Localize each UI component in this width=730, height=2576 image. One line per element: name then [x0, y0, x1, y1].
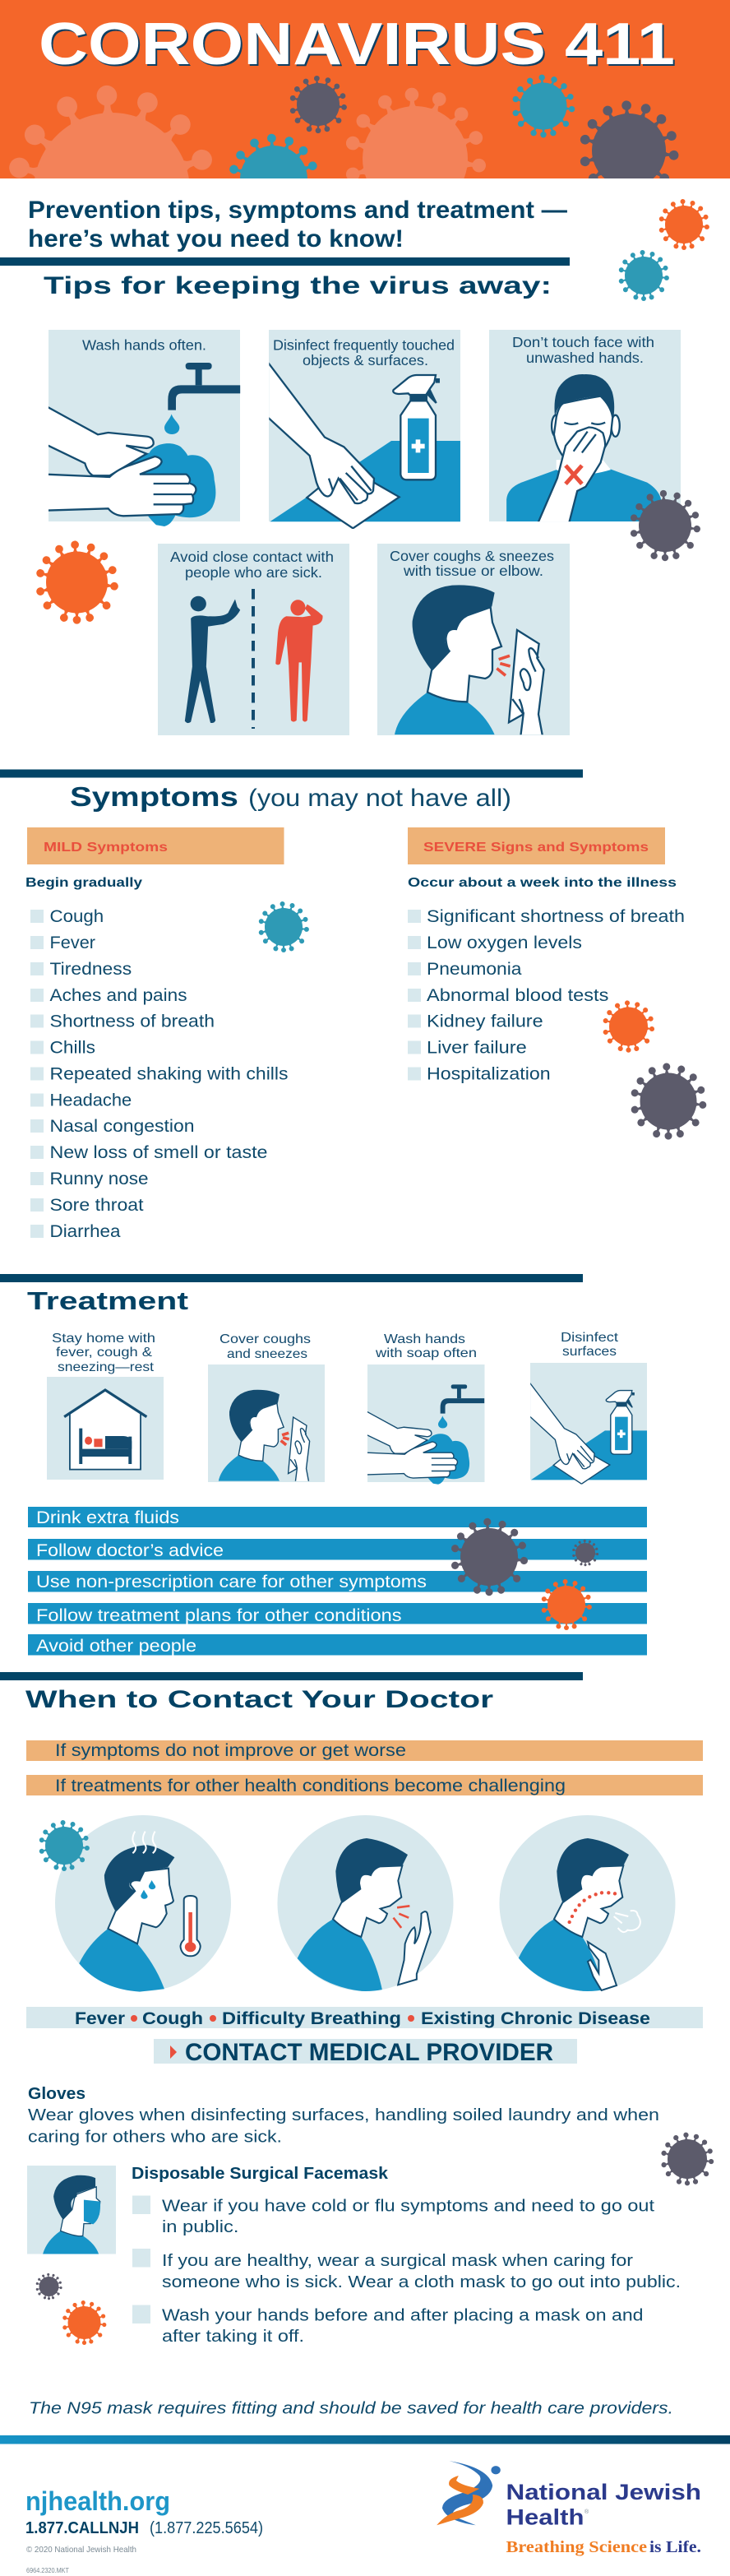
- logo: National Jewish Health: National Jewish: [506, 2480, 701, 2504]
- facemask list: Disposable Surgical Facemask: [132, 2165, 389, 2183]
- icon: teal virus: [618, 250, 669, 301]
- treatment bars: Drink extra fluids: [36, 1508, 179, 1527]
- icon: orange virus: [603, 1000, 654, 1053]
- heading: treatment: Treatment: [27, 1286, 188, 1315]
- panel: wash hands: Wash hands often.: [82, 337, 206, 354]
- facemask list: Wear if you have cold or flu symptoms and need to go out: [162, 2197, 654, 2216]
- panel: mild symptoms: Nasal congestion: [49, 1117, 194, 1136]
- panel: severe symptoms: Low oxygen levels: [427, 934, 582, 952]
- footer contact: (1.877.225.5654): [150, 2519, 263, 2537]
- icon: grey virus: [630, 490, 700, 561]
- facemask list: [132, 2165, 681, 2346]
- panel: severe symptoms: Abnormal blood tests: [427, 986, 608, 1005]
- panel: disinfect: Disinfect frequently touched: [273, 337, 455, 354]
- panel: avoid contact: Avoid close contact with: [170, 549, 334, 565]
- facemask list: in public.: [162, 2217, 238, 2236]
- panel: avoid contact: people who are sick.: [185, 564, 322, 581]
- panel: mild symptoms: Sore throat: [49, 1196, 144, 1215]
- treatment bars: Use non-prescription care for other symptoms: [36, 1573, 427, 1591]
- gloves text: [28, 2085, 659, 2147]
- panel: cover coughs: Cover coughs & sneezes: [390, 548, 554, 564]
- symptom band: Fever: [75, 2009, 125, 2028]
- panel: wash hands: [45, 330, 240, 526]
- heading: when to contact your doctor: When to Contact Your Doctor: [25, 1686, 493, 1713]
- panel: disinfect: [267, 330, 460, 528]
- symptom band: Existing Chronic Disease: [421, 2009, 650, 2028]
- panel: disinfect surfaces: [529, 1331, 647, 1484]
- panel: severe symptoms: Pneumonia: [427, 960, 522, 979]
- illustration: fever: [55, 1815, 231, 1992]
- panel: severe symptoms: Kidney failure: [427, 1012, 543, 1031]
- footer contact: © 2020 National Jewish Health: [26, 2545, 136, 2555]
- heading: tips: Tips for keeping the virus away:: [44, 272, 552, 299]
- icon: orange virus: [35, 540, 118, 624]
- panel: stay home: sneezing—rest: [58, 1360, 155, 1374]
- icon: orange virus: [658, 199, 709, 250]
- panel: mild symptoms: Begin gradually: [25, 876, 142, 890]
- heading: symptoms: [70, 781, 511, 812]
- facemask list: after taking it off.: [162, 2327, 304, 2346]
- contact medical provider callout: CONTACT MEDICAL PROVIDER: [185, 2039, 553, 2066]
- illustration: difficulty breathing: [500, 1815, 676, 1992]
- gloves text: Wear gloves when disinfecting surfaces, handling soiled laundry and when: [28, 2106, 659, 2124]
- callout bars: [26, 1740, 703, 1795]
- gloves text: caring for others who are sick.: [28, 2127, 282, 2147]
- logo: National Jewish Health: Health: [506, 2505, 584, 2530]
- facemask list: someone who is sick. Wear a cloth mask to go out into public.: [162, 2273, 681, 2291]
- panel: cover coughs and sneezes: and sneezes: [227, 1347, 307, 1361]
- icon: face touch: [506, 374, 663, 524]
- panel: wash hands with soap: with soap often: [375, 1346, 477, 1360]
- panel: disinfect: objects & surfaces.: [303, 352, 428, 368]
- panel: stay home: fever, cough &: [56, 1346, 152, 1360]
- icon: small grey virus: [35, 2273, 62, 2300]
- footer contact: [25, 2486, 263, 2574]
- panel: mild symptoms: Fever: [49, 934, 95, 952]
- panel: stay home: [47, 1332, 164, 1480]
- intro heading: Prevention tips, symptoms and treatment —: [28, 197, 567, 224]
- panel: mild symptoms: Shortness of breath: [49, 1012, 215, 1031]
- panel: mild symptoms: Repeated shaking with chills: [49, 1064, 288, 1084]
- panel: stay home: Stay home with: [52, 1332, 155, 1346]
- gloves text: Gloves: [28, 2085, 85, 2103]
- panel: mild symptoms: Chills: [49, 1038, 95, 1058]
- icon: grey virus: [661, 2132, 714, 2185]
- header viruses: [9, 74, 679, 178]
- panel: disinfect surfaces: surfaces: [562, 1345, 617, 1359]
- treatment bars: Avoid other people: [36, 1637, 196, 1656]
- symptom band: Difficulty Breathing: [222, 2009, 401, 2028]
- logo: National Jewish Health: ®: [584, 2509, 589, 2515]
- panel: mild symptoms: Diarrhea: [49, 1222, 121, 1241]
- intro heading: here’s what you need to know!: [28, 225, 404, 253]
- icon: grey virus: [450, 1518, 528, 1596]
- icon: orange virus: [62, 2300, 107, 2345]
- treatment bars: [28, 1507, 647, 1656]
- panel: severe symptoms: SEVERE Signs and Symptoms: [423, 841, 649, 855]
- callout bars: If symptoms do not improve or get worse: [55, 1741, 406, 1760]
- panel: cover coughs: [377, 544, 570, 736]
- icon: two people: [185, 596, 323, 723]
- panel: mild symptoms: Headache: [49, 1091, 132, 1110]
- panel: mask portrait: [27, 2166, 116, 2254]
- icon: teal virus: [258, 901, 309, 952]
- footer contact: 6964.2320.MKT: [26, 2567, 69, 2574]
- panel: avoid contact: [158, 544, 349, 735]
- heading: symptoms: (you may not have all): [248, 785, 511, 812]
- title: CORONAVIRUS 411: [39, 12, 675, 77]
- treatment bars: Follow doctor’s advice: [36, 1541, 224, 1560]
- logo: National Jewish Health: [437, 2461, 701, 2556]
- panel: cover coughs: with tissue or elbow.: [403, 563, 543, 579]
- panel: don't touch face: unwashed hands.: [526, 350, 644, 366]
- intro heading: [28, 197, 567, 253]
- N95 note: The N95 mask requires fitting and should be saved for health care providers.: [29, 2399, 673, 2418]
- panel: mild symptoms: Runny nose: [49, 1170, 148, 1188]
- panel: mild symptoms: [25, 827, 288, 1241]
- facemask list: Wash your hands before and after placing a mask on and: [162, 2306, 643, 2324]
- symptom band: Cough: [142, 2009, 203, 2028]
- icon: teal virus: [39, 1820, 90, 1871]
- panel: severe symptoms: [408, 827, 685, 1084]
- panel: severe symptoms: Liver failure: [427, 1038, 527, 1058]
- icon: house with bed: [64, 1390, 146, 1470]
- panel: cover coughs and sneezes: Cover coughs: [219, 1332, 311, 1346]
- symptom band: [26, 2007, 703, 2028]
- treatment bars: Follow treatment plans for other conditions: [36, 1606, 401, 1625]
- callout bars: If treatments for other health conditions become challenging: [55, 1777, 566, 1795]
- panel: severe symptoms: Hospitalization: [427, 1064, 551, 1084]
- illustration: cough: [278, 1815, 454, 1992]
- panel: cover coughs and sneezes: [208, 1332, 325, 1482]
- icon: small grey virus: [572, 1540, 598, 1566]
- panel: mild symptoms: Aches and pains: [49, 986, 187, 1005]
- footer contact: 1.877.CALLNJH: [25, 2519, 139, 2537]
- panel: severe symptoms: Occur about a week into the illness: [408, 876, 677, 890]
- panel: mild symptoms: Tiredness: [49, 960, 132, 979]
- panel: mild symptoms: Cough: [49, 907, 104, 926]
- panel: don't touch face: [489, 330, 681, 524]
- facemask list: If you are healthy, wear a surgical mask when caring for: [162, 2251, 633, 2270]
- logo: National Jewish Health: Breathing Science: [506, 2538, 647, 2556]
- icon: orange virus: [541, 1579, 592, 1630]
- heading: symptoms: Symptoms: [70, 781, 238, 812]
- panel: mild symptoms: New loss of smell or taste: [49, 1143, 268, 1162]
- panel: mild symptoms: MILD Symptoms: [44, 841, 168, 855]
- header banner: [0, 0, 730, 178]
- panel: disinfect surfaces: Disinfect: [561, 1331, 619, 1345]
- logo: National Jewish Health: is Life.: [649, 2538, 701, 2556]
- panel: wash hands with soap: Wash hands: [384, 1332, 465, 1346]
- panel: wash hands with soap: [366, 1332, 485, 1485]
- footer contact: njhealth.org: [25, 2486, 170, 2516]
- icon: grey virus: [631, 1063, 707, 1140]
- panel: don't touch face: Don’t touch face with: [512, 334, 654, 350]
- panel: severe symptoms: Significant shortness of breath: [427, 907, 685, 926]
